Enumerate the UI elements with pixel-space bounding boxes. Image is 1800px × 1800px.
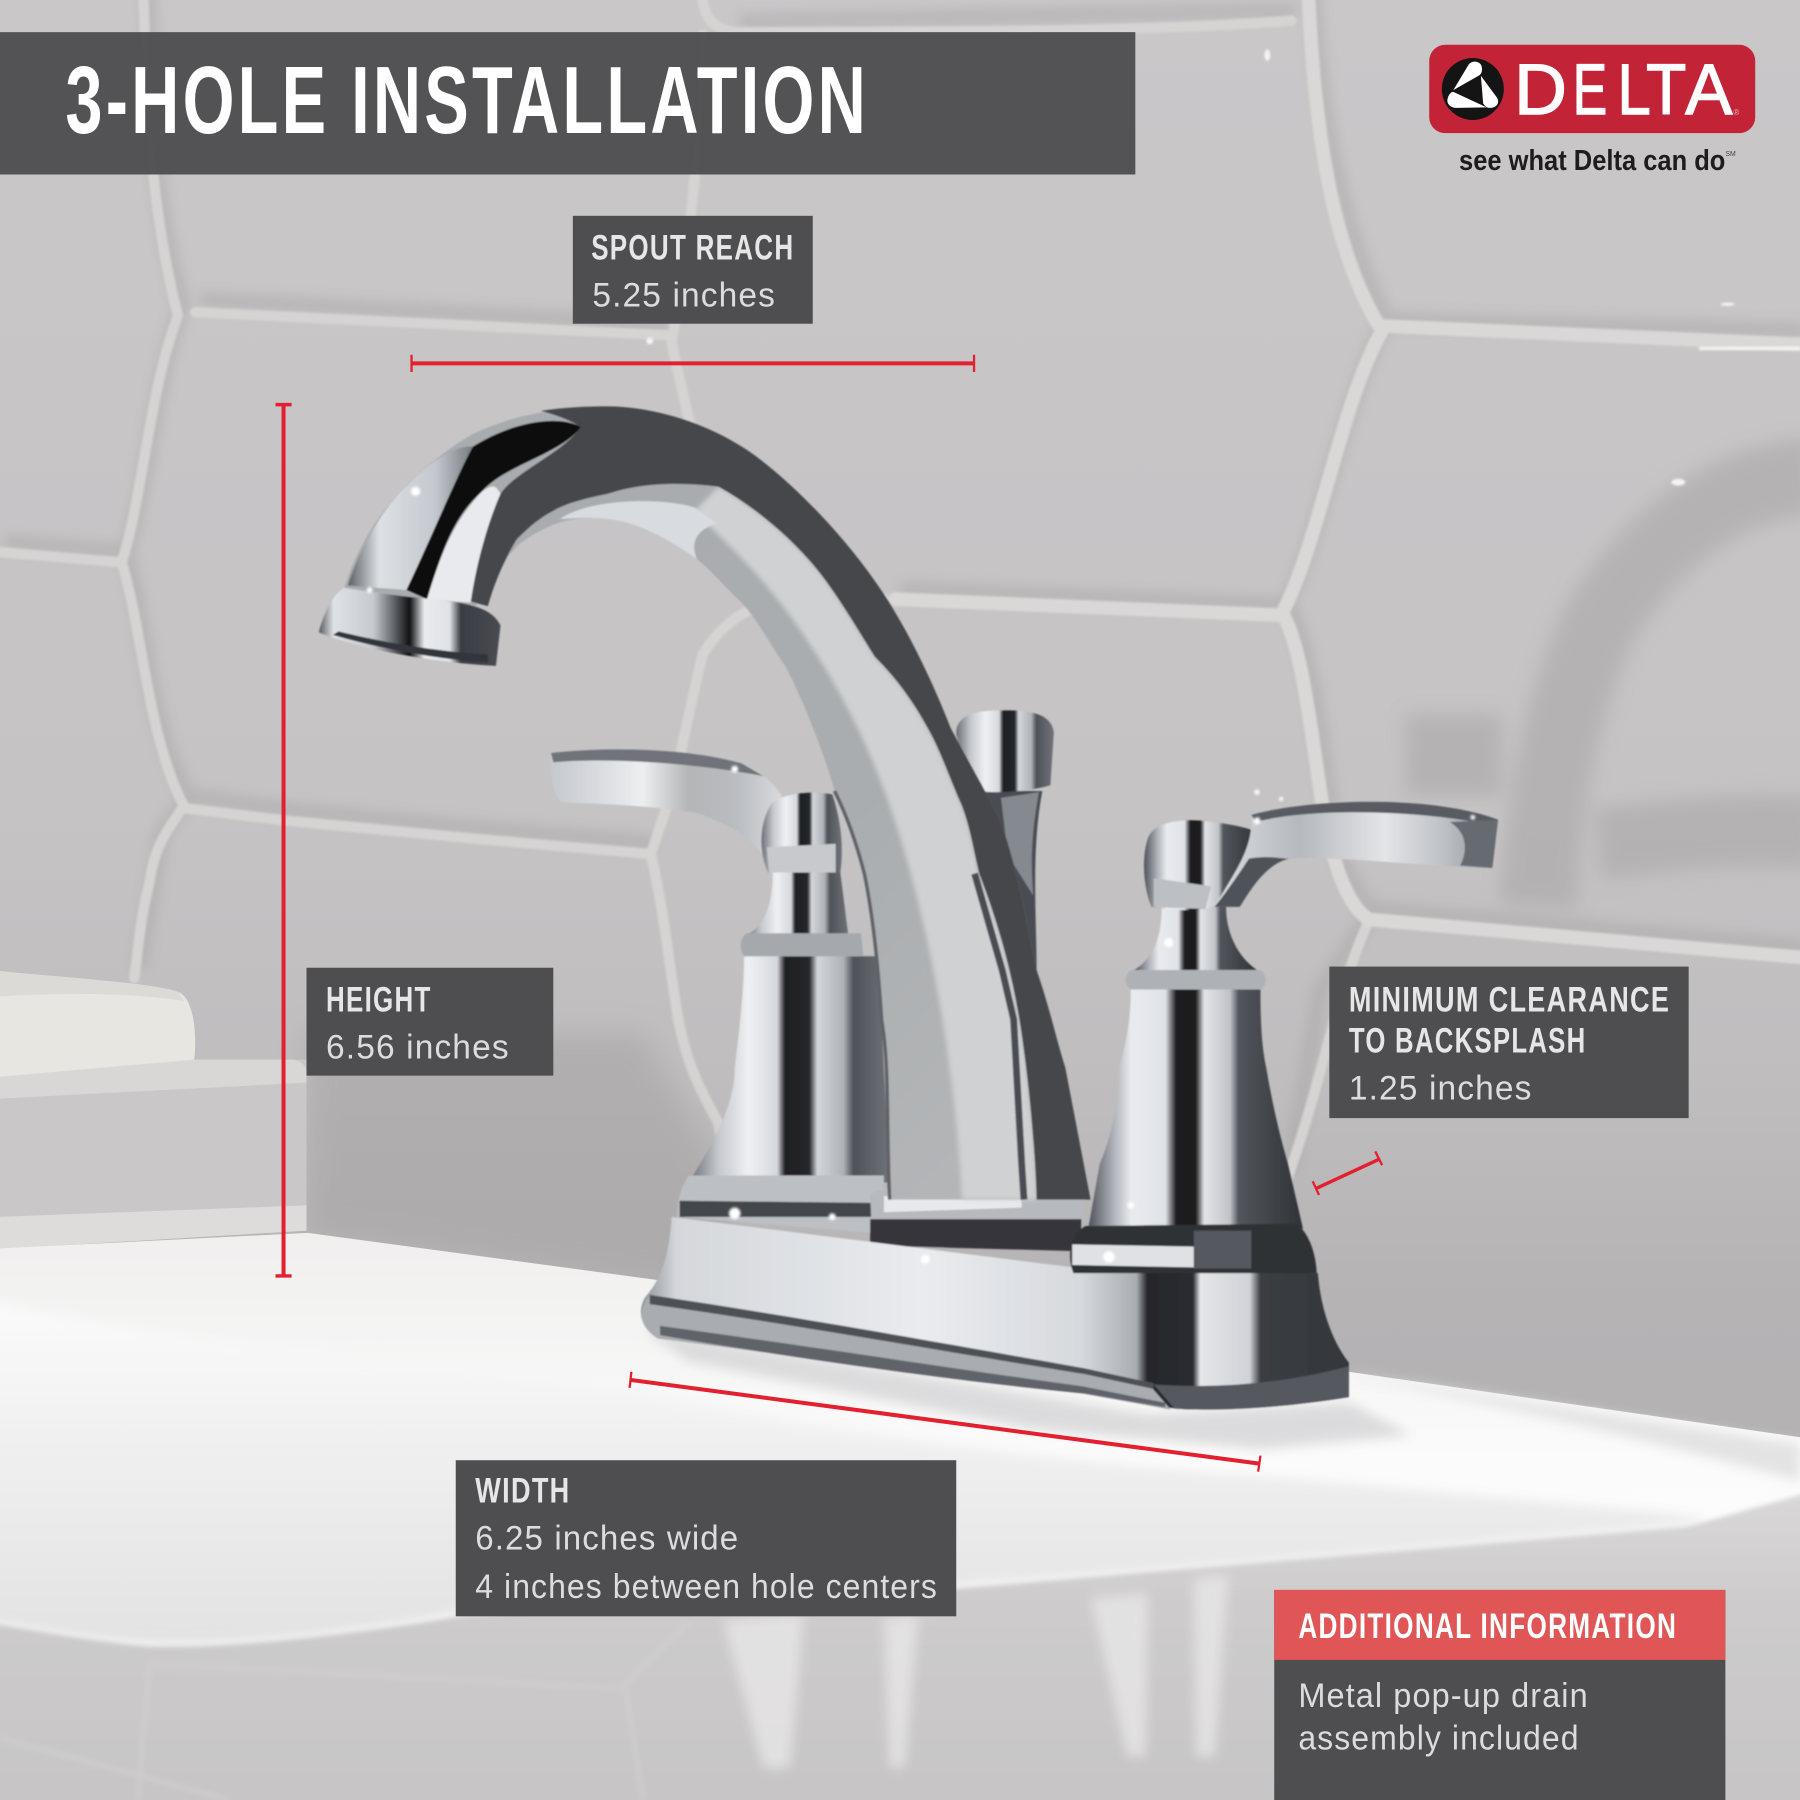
basin reflection bbox=[0, 1488, 1800, 1800]
nozzle collar bbox=[319, 588, 501, 666]
left neck bbox=[746, 872, 848, 936]
additional information body: assembly included bbox=[1298, 1719, 1580, 1757]
bright inner rim bbox=[560, 501, 717, 559]
base plate lip bbox=[642, 1295, 1349, 1410]
logo icon bbox=[1442, 58, 1504, 120]
right neck bbox=[1134, 907, 1257, 970]
sink countertop and basin bbox=[0, 1233, 1800, 1800]
dimension line: spout reach bbox=[411, 355, 975, 372]
left bell bbox=[689, 956, 890, 1182]
dimension line: height bbox=[276, 404, 292, 1277]
service mark: SM bbox=[1725, 151, 1736, 158]
left base ring bbox=[677, 1176, 884, 1234]
callout: minimum clearance bbox=[1329, 967, 1689, 1118]
lower wall shadow bbox=[308, 1033, 735, 1286]
chrome left of highlight bbox=[348, 446, 473, 590]
callout: width bbox=[456, 1460, 956, 1616]
logo wordmark: L bbox=[1617, 51, 1651, 130]
title banner bbox=[0, 32, 1135, 174]
wall water drops bbox=[646, 49, 1800, 801]
spout bbox=[344, 406, 1091, 1200]
right hub bbox=[1144, 820, 1257, 910]
logo wordmark: A bbox=[1685, 51, 1733, 130]
spout reach heading: SPOUT REACH bbox=[591, 227, 794, 267]
additional information header: ADDITIONAL INFORMATION bbox=[1298, 1606, 1677, 1646]
faucet wall reflection bbox=[1406, 476, 1800, 907]
dimension line: width bbox=[630, 1372, 1260, 1472]
logo wordmark: T bbox=[1646, 51, 1686, 130]
sparkles bbox=[367, 487, 1475, 1264]
faucet shadow on counter bbox=[643, 1329, 1412, 1449]
reflected tile grout bbox=[0, 1622, 689, 1800]
right lever bbox=[1215, 802, 1498, 907]
aerator opening bbox=[333, 631, 488, 662]
spout reach value: 5.25 inches bbox=[592, 277, 776, 315]
centre base ring bbox=[870, 1183, 1085, 1251]
panel: additional information bbox=[1274, 1590, 1725, 1800]
minimum clearance heading: MINIMUM CLEARANCE bbox=[1349, 979, 1670, 1019]
lift rod behind spout bbox=[956, 710, 1054, 970]
dimension line: clearance bbox=[1313, 1151, 1382, 1195]
dark back band bbox=[471, 406, 1091, 1200]
right bell bbox=[1088, 990, 1303, 1228]
title text: 3-HOLE INSTALLATION bbox=[65, 48, 869, 154]
additional information body: Metal pop-up drain bbox=[1298, 1677, 1589, 1715]
inner dark line bbox=[975, 874, 1024, 1200]
right collar bbox=[1126, 970, 1266, 990]
base plate bbox=[641, 1217, 1349, 1410]
height value: 6.56 inches bbox=[326, 1028, 510, 1066]
additional information body bbox=[1298, 1677, 1589, 1757]
height heading: HEIGHT bbox=[326, 979, 432, 1019]
backsplash heading: TO BACKSPLASH bbox=[1349, 1021, 1586, 1061]
reflected faucet bbox=[723, 1575, 1228, 1768]
hole centers value: 4 inches between hole centers bbox=[475, 1568, 938, 1606]
logo wordmark: D bbox=[1514, 51, 1567, 130]
callout: spout reach bbox=[573, 216, 813, 324]
right handle bbox=[1070, 802, 1498, 1273]
right base ring bbox=[1070, 1224, 1317, 1273]
width heading: WIDTH bbox=[475, 1471, 571, 1511]
additional information header bbox=[1274, 1590, 1725, 1660]
faucet bbox=[319, 406, 1498, 1449]
black highlight patch bbox=[406, 421, 581, 599]
left collar bbox=[741, 933, 863, 956]
right chrome highlight bbox=[427, 487, 501, 603]
logo wordmark bbox=[1514, 51, 1733, 130]
callout: height bbox=[307, 968, 553, 1076]
tagline: see what Delta can do bbox=[1459, 145, 1725, 177]
soap dish bbox=[0, 971, 307, 1249]
width value: 6.25 inches wide bbox=[475, 1520, 739, 1558]
light band beside dark back bbox=[695, 487, 1037, 1200]
logo wordmark: E bbox=[1573, 51, 1607, 130]
registered mark: ® bbox=[1733, 108, 1739, 117]
clearance value: 1.25 inches bbox=[1349, 1070, 1533, 1108]
left handle bbox=[550, 749, 890, 1234]
Delta logo bbox=[1429, 45, 1755, 177]
left lever bbox=[550, 749, 782, 872]
left hub bbox=[761, 793, 842, 872]
